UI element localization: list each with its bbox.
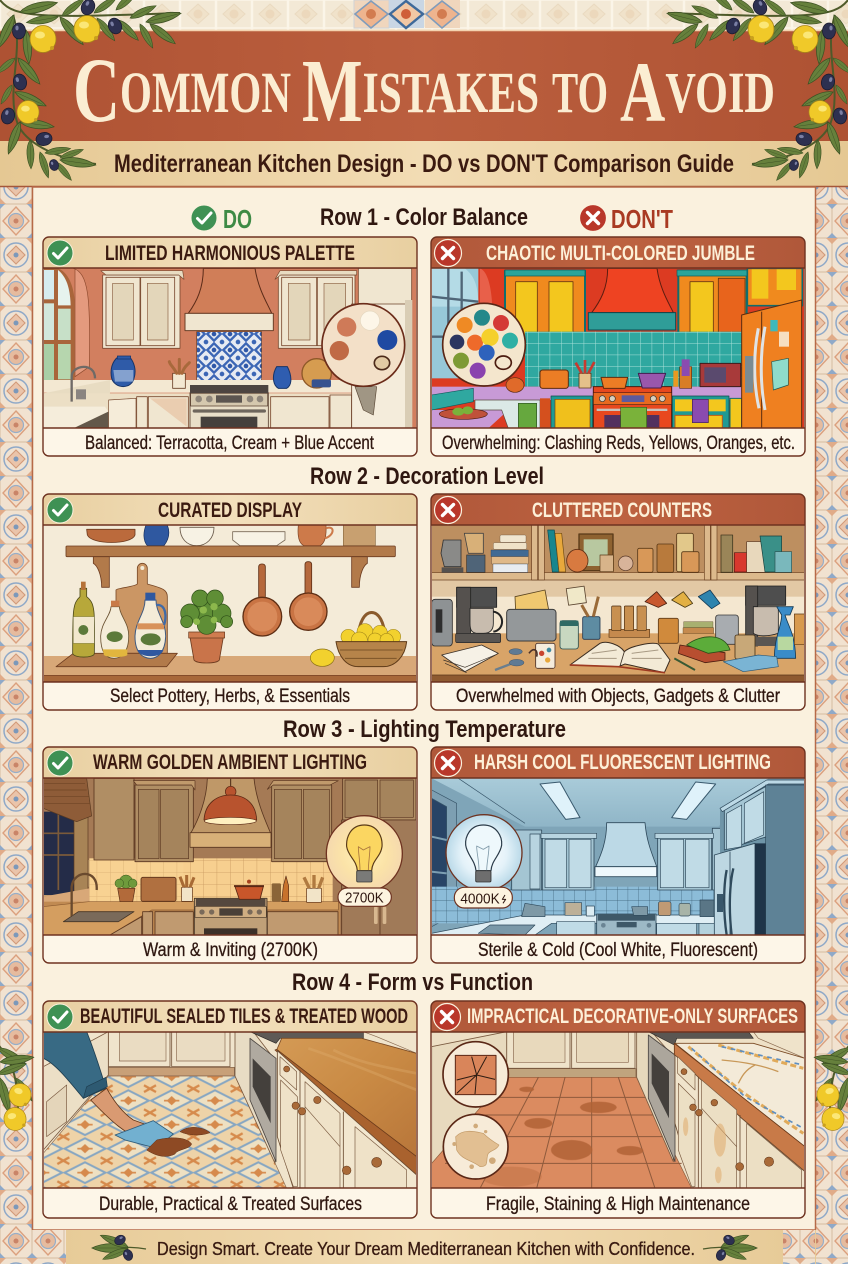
panel header: [431, 747, 805, 778]
panel: cluttered counters: [431, 494, 805, 710]
top tile strip: [0, 0, 848, 30]
panel caption: Warm & Inviting (2700K): [143, 940, 318, 961]
panel outline: [43, 237, 417, 456]
panel header: [431, 1001, 805, 1032]
title banner: [0, 30, 848, 141]
footer tiles: left: [0, 1230, 66, 1264]
panel: limited harmonious palette: [43, 237, 417, 456]
panel outline: [431, 494, 805, 710]
header text: CHAOTIC MULTI-COLORED JUMBLE: [486, 242, 755, 265]
scene: cool kitchen: 4000K: [460, 891, 500, 907]
panel: warm golden ambient lighting: [43, 747, 417, 963]
panel outline: [43, 494, 417, 710]
side branch: left: [0, 1040, 35, 1132]
panel header: [43, 237, 417, 268]
title: ISTAKES: [363, 60, 539, 125]
panel header: [431, 237, 805, 268]
scene: chaotic kitchen: [432, 268, 805, 429]
title: A: [620, 44, 665, 140]
DO column label: [191, 204, 252, 234]
panel outline: [43, 747, 417, 963]
scene: cluttered kitchen: [432, 525, 805, 682]
icon: check: [47, 1004, 73, 1030]
icon: cross: [434, 750, 462, 776]
left tile border: [0, 186, 32, 1232]
title: [73, 39, 775, 141]
icon: check: [47, 240, 73, 266]
footer sprig: right: [703, 1232, 757, 1262]
scene: warm kitchen: 2700K: [345, 891, 384, 907]
panel caption: Overwhelmed with Objects, Gadgets & Clutter: [456, 686, 781, 707]
main content panel: [32, 187, 816, 1230]
footer tiles: right: [783, 1230, 848, 1264]
panel outline: [431, 1001, 805, 1218]
icon: cross: [434, 496, 462, 524]
header text: WARM GOLDEN AMBIENT LIGHTING: [93, 751, 367, 774]
scene: warm kitchen: [43, 778, 417, 936]
icon: check: [47, 497, 73, 523]
header text: CURATED DISPLAY: [158, 499, 302, 522]
panel caption: Sterile & Cold (Cool White, Fluorescent): [478, 940, 758, 961]
icon: cross: [434, 240, 462, 266]
right tile border: [816, 186, 848, 1232]
subtitle band: [0, 141, 848, 186]
panel: curated display: [43, 494, 417, 710]
scene: cool kitchen: [432, 778, 805, 935]
panel caption: Fragile, Staining & High Maintenance: [486, 1194, 750, 1215]
footer text: Design Smart. Create Your Dream Mediterranean Kitchen with Confidence.: [157, 1239, 695, 1259]
panel outline: [431, 747, 805, 963]
panel caption: Durable, Practical & Treated Surfaces: [99, 1194, 362, 1215]
header text: CLUTTERED COUNTERS: [532, 499, 712, 522]
scene: curated shelves: [43, 525, 417, 682]
panel: impractical decorative-only surfaces: [431, 1001, 805, 1218]
panel header: [43, 1001, 417, 1032]
title: VOID: [665, 60, 775, 125]
DO column label: DO: [223, 204, 252, 234]
footer band: [0, 1230, 848, 1264]
panel: chaotic multi-colored jumble: [431, 237, 805, 456]
panel: harsh cool fluorescent lighting: [431, 747, 805, 963]
panel outline: [43, 1001, 417, 1218]
corner branch: top right: [666, 0, 848, 182]
DON'T column label: DON'T: [611, 204, 673, 234]
heading: row 2: Row 2 - Decoration Level: [310, 463, 544, 490]
panel caption: Balanced: Terracotta, Cream + Blue Accent: [85, 433, 375, 454]
header text: LIMITED HARMONIOUS PALETTE: [105, 242, 355, 265]
panel outline: [431, 237, 805, 456]
panel header: [43, 494, 417, 525]
heading: row 1: Row 1 - Color Balance: [320, 204, 528, 231]
heading: row 4: Row 4 - Form vs Function: [292, 969, 533, 996]
header text: BEAUTIFUL SEALED TILES & TREATED WOOD: [80, 1005, 408, 1028]
scene: damaged floor: [432, 1032, 805, 1188]
DON'T column label: [580, 204, 673, 234]
panel header: [431, 494, 805, 525]
icon: cross: [434, 1004, 460, 1030]
corner branch: top left: [0, 0, 182, 182]
title: TO: [552, 60, 608, 125]
scene: sealed floor: [43, 1032, 417, 1188]
panel: beautiful sealed tiles and treated wood: [43, 1001, 417, 1218]
scene: balanced kitchen: [43, 268, 417, 429]
footer sprig: left: [92, 1232, 146, 1262]
title: M: [302, 42, 363, 141]
side branch: right: [813, 1040, 848, 1132]
title: C: [73, 39, 120, 141]
icon: check: [47, 750, 73, 776]
title: OMMON: [120, 60, 291, 125]
panel header: [43, 747, 417, 778]
heading: row 3: Row 3 - Lighting Temperature: [283, 716, 566, 743]
panel caption: Select Pottery, Herbs, & Essentials: [110, 686, 350, 707]
